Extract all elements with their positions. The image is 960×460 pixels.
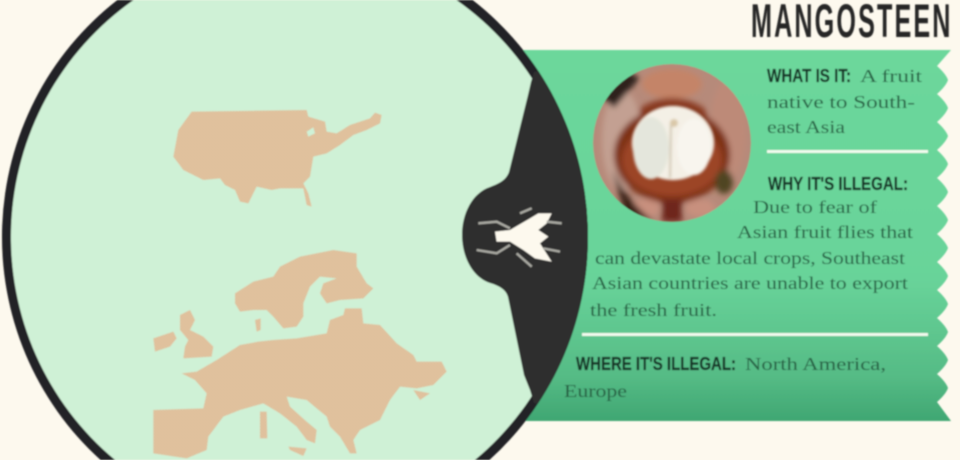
photo: mangosteen in hand (593, 64, 751, 222)
text block: why it's illegal: WHY IT'S ILLEGAL: (768, 174, 908, 194)
map: United States (173, 110, 382, 207)
map: Europe (153, 250, 447, 458)
text block: why it's illegal: Asian fruit flies that (737, 222, 913, 242)
text block: what is it: east Asia (767, 117, 845, 137)
text block: why it's illegal: Due to fear of (753, 197, 877, 217)
text block: why it's illegal: can devastate local crops, Southeast (595, 248, 905, 268)
text block: why it's illegal: Asian countries are unable to export (592, 273, 908, 293)
text block: where it's illegal: WHERE IT'S ILLEGAL: (576, 354, 736, 374)
map disc with dark ring (2, 0, 620, 460)
text block: where it's illegal: Europe (564, 381, 627, 401)
text block: where it's illegal: North America, (745, 354, 886, 374)
text block: where it's illegal (564, 354, 886, 401)
panel: green ribbon (500, 50, 951, 421)
text block: why it's illegal (590, 174, 913, 320)
text block: what is it: WHAT IS IT: (767, 66, 851, 86)
text block: what is it (767, 66, 922, 137)
text block: why it's illegal: the fresh fruit. (590, 300, 717, 320)
text block: what is it: A fruit (860, 66, 922, 86)
dark crescent with bug badge (461, 72, 587, 403)
icon: fruit fly (477, 208, 562, 267)
text block: what is it: native to South- (767, 92, 915, 112)
